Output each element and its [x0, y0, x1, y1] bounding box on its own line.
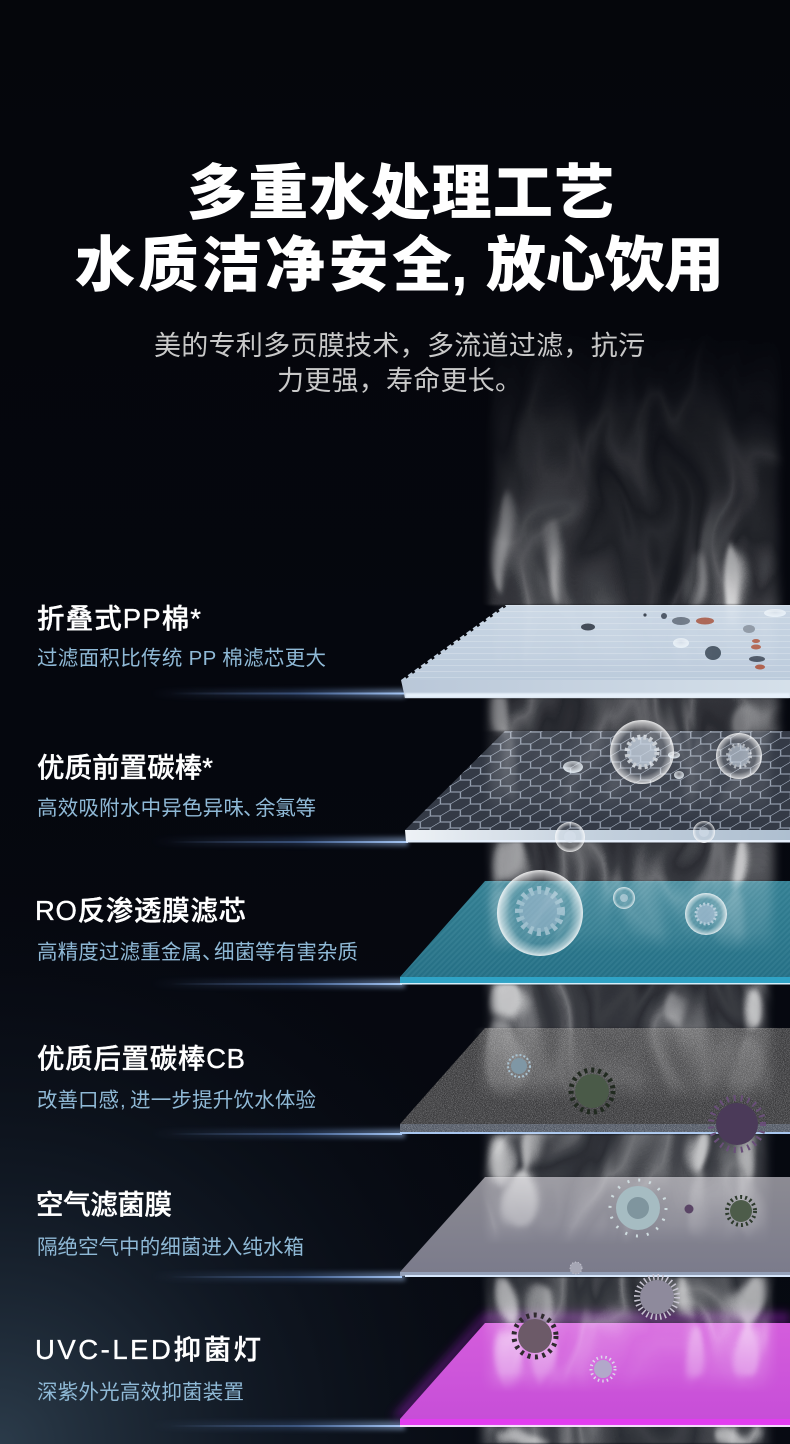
viruses on plate 4 [508, 1055, 763, 1150]
plate 1: folded PP cotton [401, 605, 790, 698]
item 4 label: 改善口感 [37, 1089, 119, 1112]
virus pale [591, 1357, 615, 1381]
virus purple [711, 1098, 763, 1150]
item 2 label: 高效吸附水中异色异味 [37, 797, 244, 820]
virus faint [570, 1262, 582, 1274]
plate 3: RO membrane [400, 881, 790, 984]
plate 6: UVC LED glow [392, 1313, 790, 1427]
viruses on plate 6 [514, 1315, 615, 1381]
glow lines [150, 689, 408, 1430]
item 5 label: 隔绝空气中的细菌进入纯水箱 [37, 1236, 304, 1259]
virus pale large [610, 1180, 666, 1236]
item 3 label: 细菌等有害杂质 [214, 941, 358, 964]
item 6 label: 深紫外光高效抑菌装置 [37, 1381, 244, 1404]
smoke streaks [489, 490, 763, 1444]
bubble large [610, 720, 674, 784]
bubble large [497, 870, 583, 956]
virus dark [514, 1315, 556, 1357]
item 2 label: 余氯等 [255, 797, 316, 820]
title: 水质洁净安全 [75, 232, 452, 299]
title: 多重水处理工艺 [187, 160, 614, 227]
title: 放心饮用 [486, 232, 724, 299]
item 1 label [37, 603, 326, 670]
item 4 label: 进一步提升饮水体验 [130, 1089, 316, 1112]
bubble medium [716, 733, 762, 779]
item 4 label: 优质后置碳棒CB [37, 1043, 245, 1074]
virus green [571, 1070, 613, 1112]
item 1 label: 过滤面积比传统 PP 棉滤芯更大 [37, 647, 326, 670]
item 4 label: , [120, 1089, 126, 1112]
virus spiky pale [637, 1277, 677, 1317]
bubble medium [685, 893, 727, 935]
item 3 label: 高精度过滤重金属 [37, 941, 202, 964]
item 1 label: 折叠式PP棉* [37, 603, 201, 634]
item 3 label: RO反渗透膜滤芯 [35, 895, 246, 926]
droplets [563, 752, 684, 779]
item 3 label [35, 895, 358, 964]
item 2 label: 、 [243, 797, 264, 820]
virus pale [508, 1055, 530, 1077]
item 2 label: 优质前置碳棒* [37, 752, 213, 783]
item 3 label: 、 [202, 941, 222, 964]
rocks and droplets [581, 609, 786, 670]
bubble small [613, 887, 635, 909]
item 6 label [35, 1334, 261, 1404]
subtitle: 力更强，寿命更长。 [277, 366, 522, 396]
bubbles on plate 2 [555, 720, 762, 852]
item 5 label: 空气滤菌膜 [36, 1189, 172, 1220]
small bubbles [555, 821, 715, 852]
smoke column [478, 360, 784, 1444]
plate 4: post carbon rod [400, 1028, 790, 1134]
plate 2: carbon rod hex grid [405, 731, 790, 842]
item 5 label [36, 1189, 304, 1259]
plate 5: air filter membrane [400, 1177, 790, 1277]
virus green [727, 1197, 755, 1225]
title: , [451, 232, 468, 299]
item 4 label [37, 1043, 316, 1112]
viruses on plate 5 [570, 1180, 755, 1317]
virus tiny purple [684, 1204, 694, 1214]
subtitle [154, 331, 645, 396]
item 2 label [37, 752, 316, 820]
subtitle: 美的专利多页膜技术，多流道过滤，抗污 [154, 331, 645, 361]
bubbles on plate 3 [497, 870, 727, 956]
title [75, 160, 724, 299]
item 6 label: UVC-LED抑菌灯 [35, 1334, 261, 1365]
